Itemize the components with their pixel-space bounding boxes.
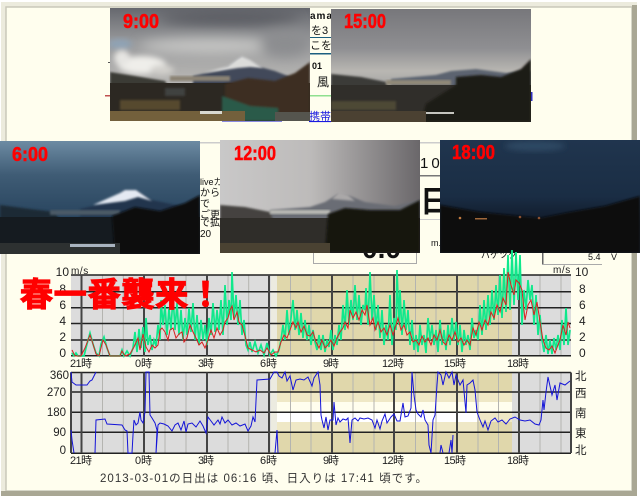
time axis labels: 18時	[507, 357, 529, 370]
background page text behind photos: ama	[310, 11, 333, 22]
right axis labels: 6	[579, 298, 586, 312]
chart background	[71, 372, 571, 454]
wind speed chart	[56, 250, 589, 370]
time axis labels: 12時	[382, 357, 404, 370]
background page text behind photos: V	[611, 252, 617, 262]
time axis labels: 3時	[198, 454, 214, 467]
right axis labels	[575, 265, 589, 360]
unit label left: m/s	[71, 266, 89, 277]
background page text behind photos: ご更新	[200, 208, 230, 221]
degree axis labels: 0	[60, 445, 66, 457]
time label: 18:00	[452, 142, 495, 164]
time axis labels: 9時	[323, 357, 339, 370]
left axis labels	[56, 265, 69, 360]
time axis labels: 12時	[382, 454, 404, 467]
left axis labels: 6	[59, 298, 66, 312]
background page text behind photos: 01	[312, 61, 322, 71]
photo: 15:00	[331, 9, 531, 122]
background page text behind photos: パケツク	[481, 250, 517, 260]
chart background	[71, 275, 571, 356]
right axis labels: 8	[579, 282, 586, 296]
background page text behind photos: こを	[310, 39, 332, 52]
background page text behind photos: m.	[431, 238, 441, 248]
background page text behind photos: から	[200, 187, 220, 199]
right axis labels: 4	[579, 314, 586, 328]
time axis labels: 15時	[444, 357, 466, 370]
right axis labels: 0	[579, 346, 586, 360]
time label: 6:00	[12, 144, 48, 166]
time axis labels	[70, 454, 529, 467]
mean wind series (red)	[72, 272, 570, 356]
background page text behind photos: 風	[317, 75, 329, 89]
background page text behind photos: で	[200, 199, 210, 210]
background page text behind photos: 10	[420, 155, 443, 172]
compass axis labels	[575, 370, 587, 457]
photo: 6:00	[0, 141, 200, 254]
background page text behind photos	[105, 11, 617, 265]
photo: 9:00	[108, 8, 310, 121]
background page text behind photos: で拡大	[200, 216, 230, 229]
time label: 12:00	[234, 143, 276, 165]
degree axis labels: 360	[50, 370, 69, 382]
time label: 9:00	[123, 11, 159, 33]
degree axis labels	[47, 370, 69, 457]
background page text behind photos: liveカ	[200, 177, 223, 187]
time axis labels: 6時	[260, 454, 277, 467]
background page text behind photos: 20	[200, 229, 212, 240]
time axis labels: 21時	[70, 454, 92, 467]
left axis labels: 2	[59, 330, 66, 344]
time axis labels: 21時	[70, 357, 92, 370]
degree axis labels: 270	[47, 387, 66, 399]
compass axis labels: 西	[575, 388, 586, 400]
time axis labels: 0時	[135, 454, 152, 467]
degree axis labels: 90	[53, 427, 66, 439]
time axis labels: 15時	[444, 454, 466, 467]
compass axis labels: 東	[575, 427, 587, 440]
left axis labels: 8	[59, 282, 66, 296]
time axis labels: 9時	[323, 454, 339, 467]
left axis labels: 10	[56, 265, 69, 279]
time axis labels: 6時	[260, 357, 277, 370]
gust series (green)	[72, 250, 570, 356]
degree axis labels: 180	[47, 407, 66, 419]
sunrise and sunset note: 2013-03-01の日出は 06:16 頃、日入りは 17:41 頃です。	[100, 472, 427, 485]
unit label right: m/s	[553, 265, 571, 276]
wind direction trace (blue)	[71, 372, 570, 453]
wind direction chart	[47, 370, 587, 467]
time axis labels: 18時	[507, 454, 529, 467]
time axis labels	[70, 357, 529, 370]
time label: 15:00	[344, 11, 386, 33]
left axis labels: 4	[59, 314, 66, 328]
background page text behind photos: 0.0	[362, 233, 401, 264]
time axis labels: 3時	[198, 357, 214, 370]
compass axis labels: 南	[575, 406, 586, 420]
compass axis labels: 北	[575, 444, 587, 457]
background page text behind photos: 日	[420, 186, 450, 219]
right axis labels: 10	[575, 265, 589, 279]
headline: 春一番襲来！	[20, 268, 222, 316]
background page text behind photos: 5.4	[588, 252, 601, 262]
photo: 12:00	[220, 140, 420, 253]
left axis labels: 0	[59, 346, 66, 360]
background page text behind photos: 携帯	[309, 110, 331, 123]
background page text behind photos: を3	[311, 24, 328, 37]
time axis labels: 0時	[135, 357, 152, 370]
compass axis labels: 北	[575, 370, 587, 383]
photo: 18:00	[440, 140, 640, 253]
right axis labels: 2	[579, 330, 586, 344]
